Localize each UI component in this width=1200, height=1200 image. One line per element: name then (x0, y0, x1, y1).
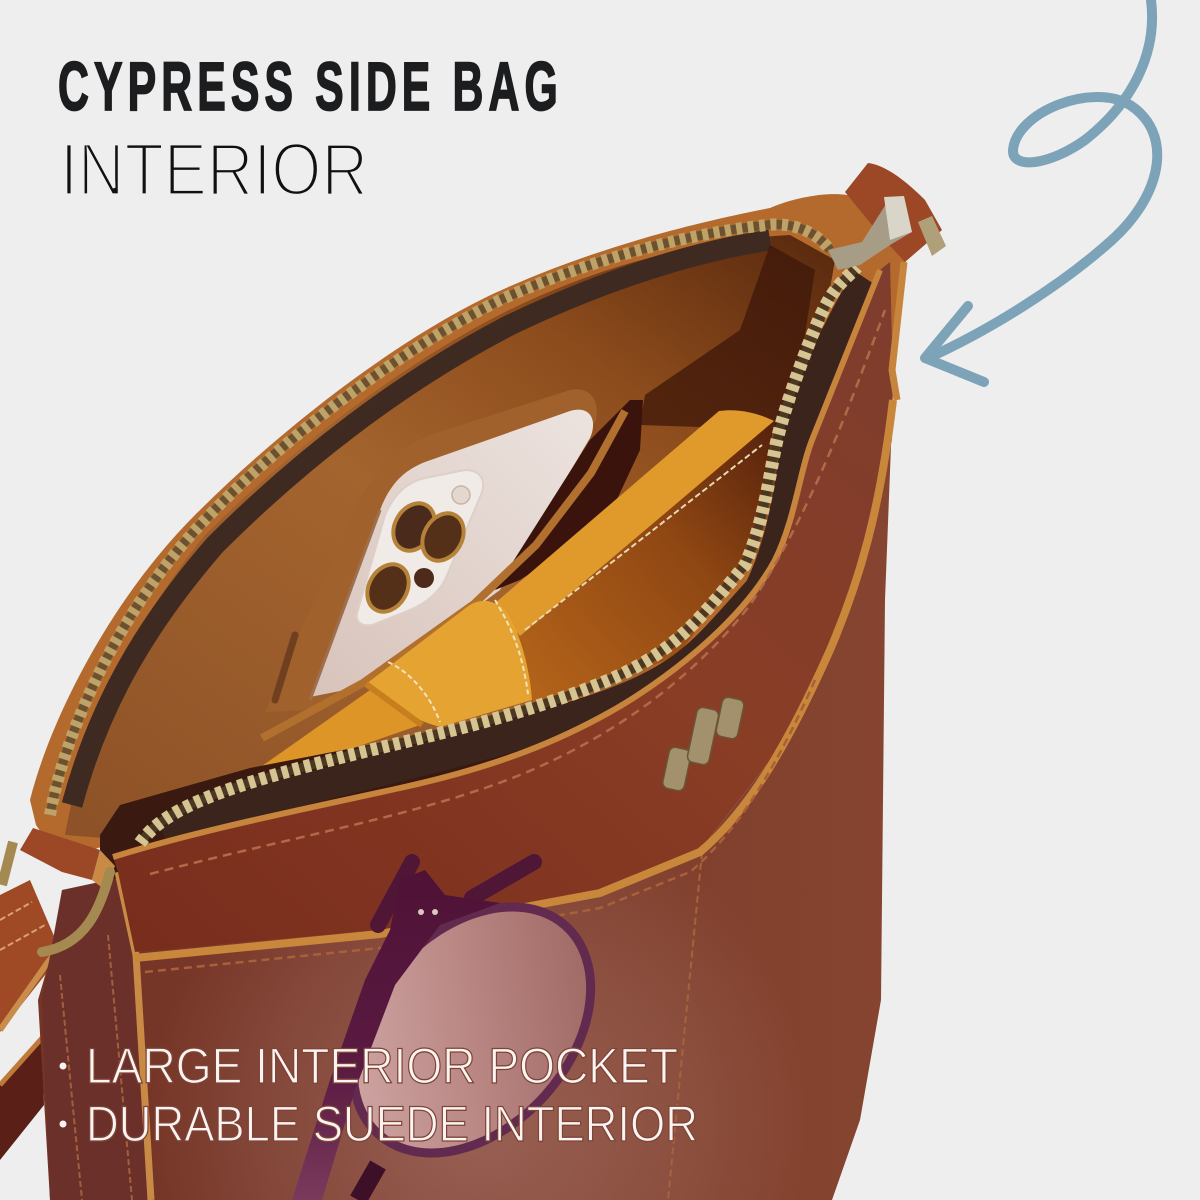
suede interior (65, 235, 835, 840)
back zipper tape (72, 240, 770, 805)
feature list: DURABLE SUEDE INTERIOR (86, 1096, 698, 1152)
title (58, 49, 558, 211)
left strap loop and brass ring (2, 828, 115, 952)
notebook top edge (494, 410, 774, 636)
glasses lens (305, 860, 639, 1200)
gusset raw edge (118, 872, 151, 1200)
feature list: LARGE INTERIOR POCKET (86, 1038, 678, 1094)
notebook cover (520, 421, 774, 715)
zipper pull hardware (828, 196, 946, 270)
suede pocket edge (262, 411, 625, 738)
front zipper chain (140, 267, 857, 843)
phone side edge and button (310, 510, 380, 700)
gusset stitching (60, 935, 132, 1200)
interior dark corner (640, 245, 815, 430)
notebook lower edge (245, 690, 420, 778)
left lower strap (0, 880, 62, 1160)
glasses (292, 860, 639, 1200)
left side gusset (42, 878, 152, 1200)
pocket raw edge (135, 400, 893, 958)
dark wedge under the front zipper (100, 700, 610, 885)
smartphone (275, 410, 593, 700)
title: INTERIOR (60, 128, 368, 211)
back zipper chain (50, 224, 830, 815)
arrow: blue curl pointing at the bag (925, 0, 1157, 382)
front panel raw edge (113, 270, 880, 857)
front panel stitching (150, 310, 885, 874)
notebook elastic band (366, 601, 532, 727)
pocket stitching (145, 680, 815, 972)
back panel with raw leather edge (30, 194, 906, 860)
yellow notebook (245, 410, 774, 778)
title: CYPRESS SIDE BAG (58, 49, 558, 126)
phone pocket suede (265, 389, 597, 712)
lower pocket side seam (668, 852, 702, 1200)
camera module (357, 470, 483, 625)
feature list (60, 1038, 698, 1152)
front zipper teeth (140, 267, 857, 843)
lower pocket sheen (136, 850, 886, 1200)
front upper panel (113, 262, 893, 952)
top right strap tab (845, 163, 942, 262)
back zipper teeth (50, 224, 830, 815)
glasses hinge and frame side (292, 870, 500, 1200)
front zipper tape (165, 280, 868, 838)
bag (0, 163, 946, 1200)
dark inner pocket sleeve (495, 400, 643, 590)
glasses temple arms (378, 862, 534, 925)
brass studs (662, 696, 745, 792)
lower pocket body (38, 420, 892, 1200)
right raw edge (892, 262, 904, 400)
